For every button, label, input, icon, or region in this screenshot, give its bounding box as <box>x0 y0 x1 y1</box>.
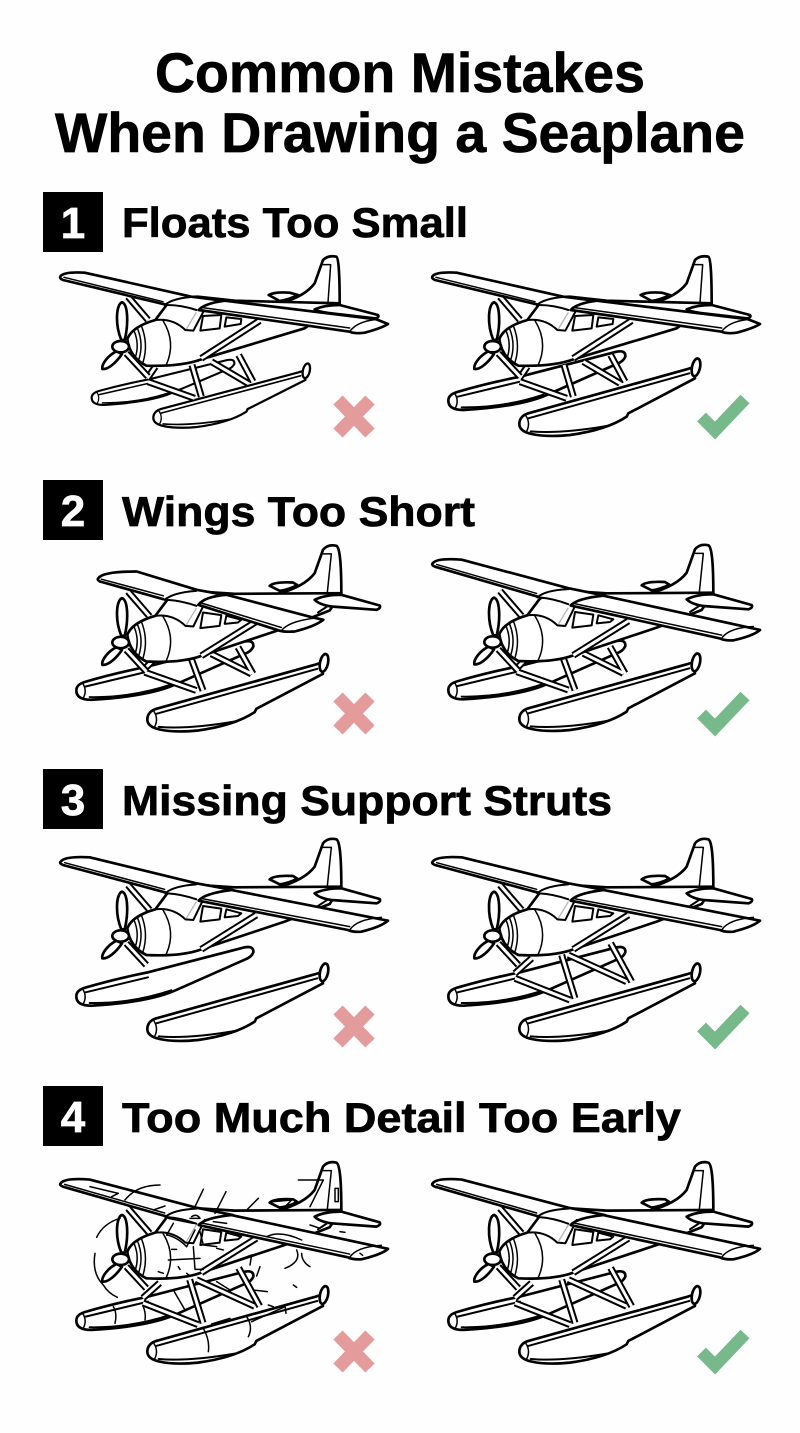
icon: check <box>702 399 745 430</box>
panel: mistake 4 too much detail too early <box>43 1086 760 1368</box>
icon: check <box>702 1009 745 1040</box>
icon: check <box>702 1334 745 1366</box>
panel: mistake 2 wings too short <box>43 480 760 731</box>
heading: mistake 3: 3 <box>61 776 85 825</box>
heading: mistake 4: 4 <box>61 1093 86 1142</box>
heading: mistake 3 <box>43 769 612 829</box>
icon: cross <box>338 1010 370 1043</box>
icon: cross <box>338 1335 370 1368</box>
heading: mistake 2: 2 <box>61 487 85 536</box>
scribbled extra detail lines <box>90 1180 363 1352</box>
heading: mistake 3: Missing Support Struts <box>122 777 612 824</box>
seaplane: simple clean version <box>432 1162 760 1364</box>
seaplane: floats too small <box>60 256 388 428</box>
title: Common Mistakes <box>155 41 645 104</box>
icon: cross <box>338 697 370 730</box>
title: When Drawing a Seaplane <box>55 101 745 164</box>
seaplane: too much detail <box>60 1162 388 1364</box>
heading: mistake 1 <box>43 192 468 252</box>
heading: mistake 4 <box>43 1086 682 1146</box>
panel: mistake 3 missing support struts <box>43 769 760 1043</box>
heading: mistake 1: Floats Too Small <box>122 199 468 246</box>
title <box>55 41 745 164</box>
heading: mistake 4: Too Much Detail Too Early <box>122 1094 682 1141</box>
heading: mistake 1: 1 <box>61 199 85 248</box>
heading: mistake 2: Wings Too Short <box>122 488 475 535</box>
seaplane: correct struts <box>432 839 760 1041</box>
seaplane: wings too short <box>76 545 380 731</box>
panel: mistake 1 floats too small <box>43 192 760 436</box>
seaplane: correct floats <box>432 256 760 436</box>
seaplane: correct wings <box>432 545 760 731</box>
icon: check <box>702 696 745 728</box>
heading: mistake 2 <box>43 480 475 540</box>
icon: cross <box>338 400 370 433</box>
seaplane: missing struts <box>60 839 388 1041</box>
